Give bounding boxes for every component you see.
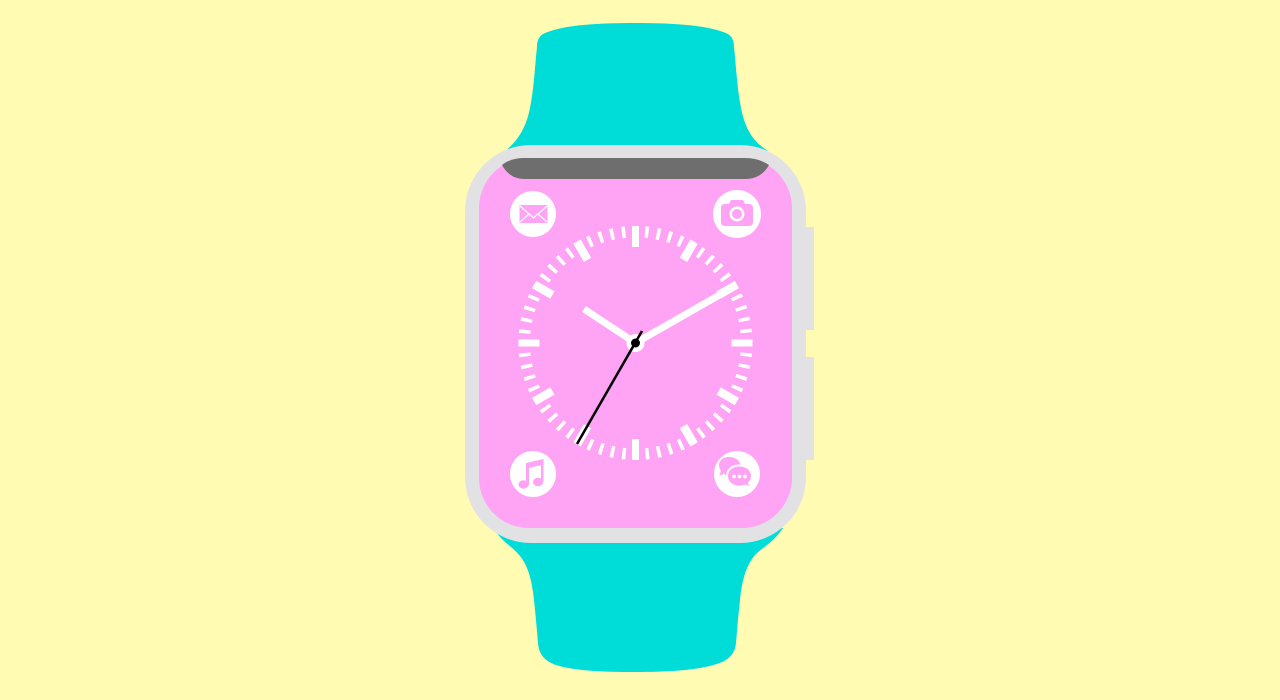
icon: camera bbox=[713, 190, 761, 238]
side buttons bbox=[800, 227, 814, 460]
hour ticks bbox=[518, 226, 752, 460]
minute hand bbox=[636, 285, 737, 343]
center hub bbox=[626, 334, 644, 352]
center pin bbox=[631, 338, 640, 348]
minute ticks bbox=[524, 232, 747, 454]
top strap bbox=[503, 23, 768, 153]
icon: chat bbox=[714, 451, 760, 497]
bottom strap bbox=[495, 528, 783, 672]
hour hand bbox=[584, 309, 636, 343]
icon: music bbox=[510, 451, 556, 497]
icon: mail bbox=[510, 191, 556, 237]
second hand bbox=[577, 331, 642, 444]
top speaker notch bbox=[502, 158, 769, 179]
watch case bbox=[465, 145, 806, 543]
screen bbox=[479, 158, 792, 528]
